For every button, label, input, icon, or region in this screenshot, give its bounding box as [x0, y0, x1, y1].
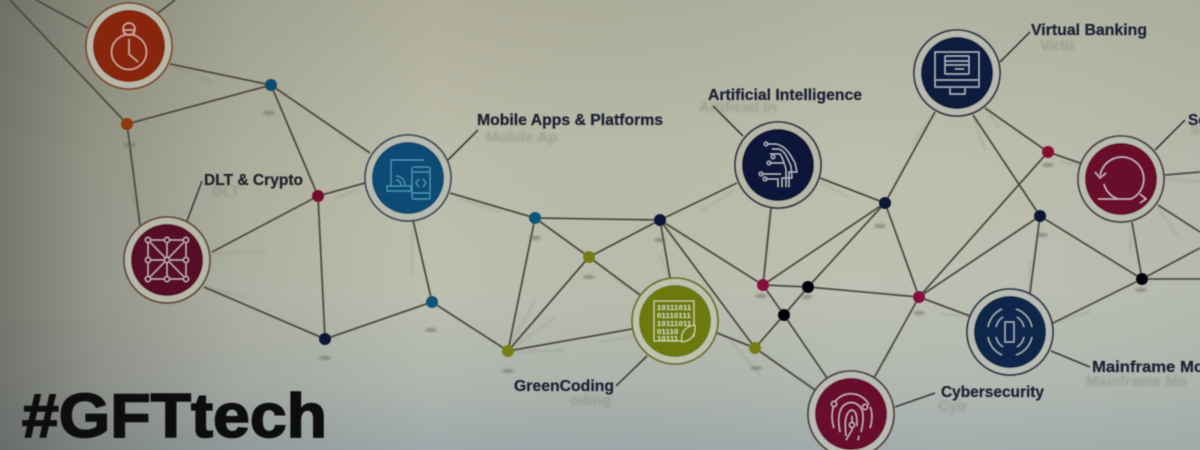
icon: mobile apps: [365, 135, 451, 221]
icon: cybersecurity fingerprint: [808, 371, 894, 450]
network nodes: [121, 79, 1148, 357]
icon: agile loop: [1078, 136, 1164, 222]
faint reflections of connecting lines: [130, 65, 1200, 392]
label: GreenCoding: GreenCoding: [514, 378, 614, 395]
icon: green coding: 01110: [657, 327, 679, 336]
hashtag heading: #GFTtech: [22, 382, 327, 450]
label: Mobile Apps & Platforms: Mobile Apps & Platforms: [477, 112, 663, 129]
reflected ghost labels: Mainframe Mo: [1086, 373, 1187, 390]
label: Virtual Banking: Virtual Banking: [1031, 22, 1147, 39]
label: Mainframe Modernisation (cropped): Mainframe Mo: [1092, 359, 1200, 376]
label leader lines: [187, 32, 1185, 407]
reflected ghost labels: oding: [570, 392, 611, 409]
node shadows: [124, 111, 1147, 373]
icon: green coding: 10111011: [657, 303, 692, 312]
icon: green coding: 10111: [657, 334, 679, 343]
reflected ghost labels: S: [1190, 121, 1200, 138]
reflected ghost labels: Cyb: [938, 398, 966, 415]
icon: stopwatch: [86, 3, 172, 89]
icon: artificial intelligence: [735, 122, 821, 208]
icon: mainframe modernisation: [967, 289, 1053, 375]
reflected ghost labels: Artificial In: [699, 99, 777, 116]
reflected ghost labels: Mobile Ap: [486, 129, 557, 146]
reflected ghost labels: [212, 37, 1200, 415]
icon: green coding: [632, 278, 718, 364]
icon: green coding: 10111011: [657, 319, 692, 328]
reflected ghost labels: Virtu: [1040, 37, 1074, 54]
icon: virtual banking monitor: [914, 30, 1000, 116]
reflected ghost labels: DLT: [212, 183, 240, 200]
label: Artificial Intelligence: Artificial Intelligence: [708, 87, 862, 104]
label: DLT & Crypto: DLT & Crypto: [204, 172, 303, 189]
label: Cybersecurity: Cybersecurity: [941, 384, 1044, 401]
icon: green coding: 01110111: [657, 311, 691, 320]
icon: DLT network grid: [124, 217, 210, 303]
